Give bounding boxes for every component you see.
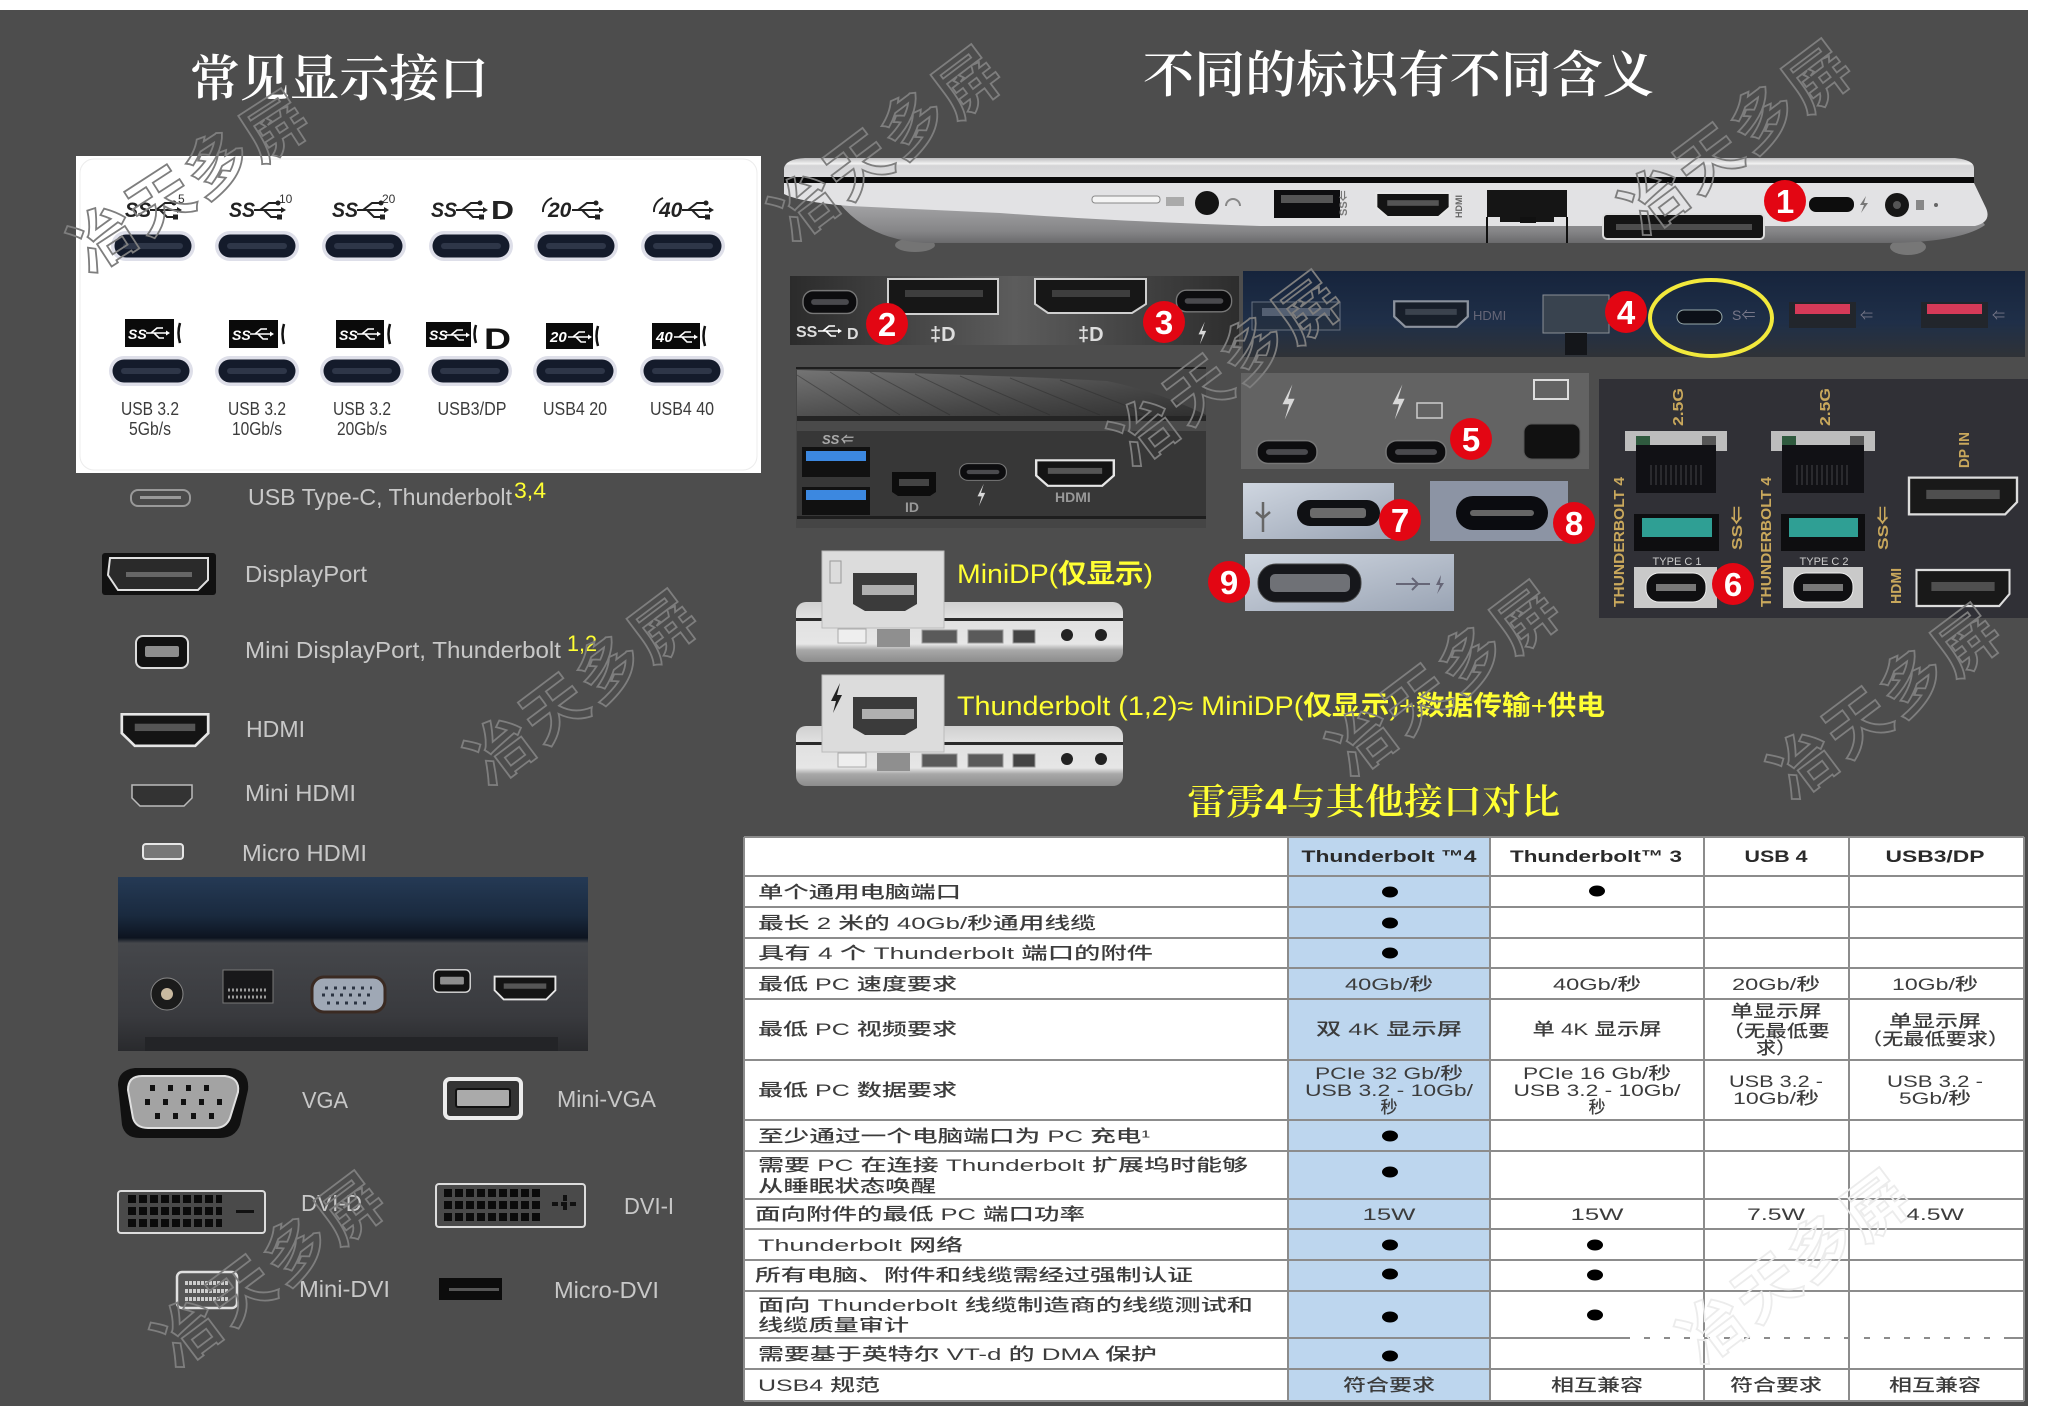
photo: USB-C port (9) xyxy=(1245,554,1454,611)
port captions xyxy=(121,399,714,439)
photo: DP ports strip xyxy=(790,276,1239,346)
row: accessories: 具有 4 个 Thunderbolt 端口的附件 xyxy=(758,944,1153,963)
row: header: Thunderbolt ™4 xyxy=(1302,847,1477,866)
labels: gold port text: SS⇐ xyxy=(1729,506,1746,550)
port captions: 5Gb/s xyxy=(129,419,171,439)
watermarks: 冶天多屏 xyxy=(445,565,717,803)
row: minimum video: 单显示屏 xyxy=(1889,1012,1981,1031)
row: cable audit: 线缆质量审计 xyxy=(758,1315,909,1335)
port: SD slot xyxy=(1092,196,1160,203)
labels: gold port text: TYPE C 1 xyxy=(1653,556,1701,568)
row: badged logos and ports: SS xyxy=(232,327,251,343)
icon: bolt xyxy=(1860,196,1868,213)
row: header xyxy=(1302,847,1984,866)
port captions: USB 3.2 xyxy=(333,399,391,419)
photo: Thunderbolt laptop xyxy=(796,675,1123,786)
row: header: USB3/DP xyxy=(1886,847,1984,866)
row: USB4 spec: 符合要求 xyxy=(1343,1376,1435,1395)
row: header: USB 4 xyxy=(1744,847,1808,866)
labels: gold port text: THUNDERBOLT 4 xyxy=(1611,476,1628,607)
row: plain logos and ports: 20 xyxy=(382,192,396,206)
photo: MiniDP laptop xyxy=(796,551,1123,662)
photo: USB-C port (8) xyxy=(1430,481,1568,541)
row: minimum video: 单 4K 显示屏 xyxy=(1532,1020,1662,1039)
row: single universal port: 单个通用电脑端口 xyxy=(758,883,961,902)
row: plain logos and ports: SS xyxy=(431,199,457,222)
watermarks: 冶天多屏 xyxy=(1599,15,1871,253)
labels: gold port text: 2.5G xyxy=(1817,388,1834,426)
row: plain logos and ports: 20 xyxy=(547,199,572,222)
photo: USB-C port (7) xyxy=(1243,483,1394,539)
item: Mini-DVI: Mini-DVI xyxy=(299,1276,390,1302)
row: minimum speed: 最低 PC 速度要求 xyxy=(758,975,957,994)
item: Mini HDMI xyxy=(132,780,356,806)
row: plain logos and ports xyxy=(111,192,725,261)
item: Micro-DVI: Micro-DVI xyxy=(554,1277,659,1303)
item: DVI-D xyxy=(118,1190,362,1233)
row: port power: 4.5W xyxy=(1906,1205,1964,1224)
row: badged logos and ports: SS xyxy=(128,326,147,342)
row: 2m cable: 最长 2 米的 40Gb/秒通用线缆 xyxy=(758,914,1096,933)
number badges: 8 xyxy=(1565,505,1583,542)
row: minimum data: 最低 PC 数据要求 xyxy=(758,1081,957,1100)
item: DisplayPort: DisplayPort xyxy=(245,561,368,587)
row: minimum data: 10Gb/秒 xyxy=(1733,1089,1819,1108)
row: plain logos and ports: 10 xyxy=(279,192,293,206)
row: port power xyxy=(755,1204,1964,1224)
row: port power: 7.5W xyxy=(1747,1205,1805,1224)
row: minimum data: USB 3.2 - 10Gb/ xyxy=(1514,1081,1681,1100)
row: minimum data: PCIe 32 Gb/秒 xyxy=(1315,1064,1463,1083)
port: power jack xyxy=(1885,193,1938,217)
item: Micro-DVI xyxy=(439,1277,659,1303)
row: wake from sleep: 从睡眠状态唤醒 xyxy=(758,1177,936,1196)
row: DMA protection xyxy=(758,1345,1398,1364)
photo: DP ports strip: SS xyxy=(796,324,818,341)
item: VGA xyxy=(118,1068,349,1138)
photo: monitor rear ports xyxy=(118,877,588,1051)
row: plain logos and ports: D xyxy=(491,195,514,225)
row: port power: 面向附件的最低 PC 端口功率 xyxy=(755,1204,1085,1224)
labels: gold port text: 2.5G xyxy=(1670,388,1687,426)
port: red USB: ⇐ xyxy=(1860,308,1873,323)
item: USB Type-C: 3,4 xyxy=(514,478,546,503)
row: USB4 spec: 相互兼容 xyxy=(1889,1375,1981,1395)
row: minimum data: 5Gb/秒 xyxy=(1899,1089,1971,1108)
row: minimum speed: 10Gb/秒 xyxy=(1892,975,1978,994)
row: minimum data: 秒 xyxy=(1380,1098,1398,1117)
row: accessories xyxy=(758,944,1398,963)
port: HDMI: HDMI xyxy=(1454,195,1464,218)
row: USB4 spec xyxy=(758,1375,1981,1395)
item: USB Type-C xyxy=(131,478,546,510)
row: header: Thunderbolt™ 3 xyxy=(1510,847,1682,866)
port: dock connector xyxy=(1603,214,1764,239)
row: port power: 15W xyxy=(1362,1205,1416,1224)
row: badged logos and ports: SS xyxy=(429,327,448,343)
port captions: 10Gb/s xyxy=(232,419,282,439)
row: minimum video: （无最低要 xyxy=(1722,1022,1830,1041)
row: charging xyxy=(758,1127,1398,1146)
number badges: 7 xyxy=(1391,502,1409,539)
port: red USB xyxy=(1789,302,1873,328)
row: minimum data: USB 3.2 - xyxy=(1887,1072,1983,1091)
item: DisplayPort xyxy=(102,553,368,595)
number badges: 5 xyxy=(1462,421,1480,458)
labels: gold port text: THUNDERBOLT 4 xyxy=(1758,476,1775,607)
port: teal USB pair xyxy=(1634,514,1865,551)
number badges: 1 xyxy=(1776,183,1794,220)
photo: dock front xyxy=(796,368,1206,528)
number badges: 9 xyxy=(1220,564,1238,601)
row: minimum data: USB 3.2 - 10Gb/ xyxy=(1305,1081,1473,1100)
item: Mini DisplayPort: Mini DisplayPort, Thunderbolt xyxy=(245,637,562,663)
port captions: USB4 20 xyxy=(543,399,607,419)
photo: dock front: ID xyxy=(905,499,919,515)
number badges xyxy=(866,180,1806,605)
row: minimum data xyxy=(758,1064,1983,1117)
row: minimum video: （无最低要求） xyxy=(1861,1030,2009,1049)
row: wake from sleep xyxy=(758,1156,1398,1196)
watermarks: 冶天多屏 xyxy=(1089,246,1361,484)
row: cable audit: 面向 Thunderbolt 线缆制造商的线缆测试和 xyxy=(758,1296,1253,1315)
labels: gold port text xyxy=(1611,388,1973,607)
port: red USB xyxy=(1921,302,2005,328)
labels: gold port text: DP IN xyxy=(1956,432,1973,468)
row: certification: 所有电脑、附件和线缆需经过强制认证 xyxy=(755,1266,1193,1285)
title: different marks: 不同的标识有不同含义 xyxy=(1143,35,1654,107)
caption: Thunderbolt description: Thunderbolt (1,2)≈ MiniDP( 仅显示)+数据传输 +供电 xyxy=(957,691,1605,721)
row: USB4 spec: 相互兼容 xyxy=(1551,1375,1643,1395)
item: Mini-VGA: Mini-VGA xyxy=(557,1086,657,1112)
row: plain logos and ports: SS xyxy=(125,199,151,222)
row: USB4 spec: USB4 规范 xyxy=(758,1376,880,1395)
port: red USB: ⇐ xyxy=(1992,308,2005,323)
labels: gold port text: TYPE C 2 xyxy=(1800,556,1848,568)
callout: yellow ring xyxy=(1650,280,1772,356)
item: Mini DisplayPort: 1,2 xyxy=(567,631,597,656)
item: Mini-DVI xyxy=(177,1272,390,1308)
list: display port types xyxy=(102,478,597,866)
row: plain logos and ports: SS xyxy=(332,199,358,222)
table: Thunderbolt 4 comparison xyxy=(744,837,2024,1401)
number badges: 3 xyxy=(1155,304,1173,341)
item: Mini HDMI: Mini HDMI xyxy=(245,780,356,806)
row: badged logos and ports: 20 xyxy=(549,329,567,346)
row: networking: Thunderbolt 网络 xyxy=(758,1235,963,1255)
watermarks: 冶天多屏 xyxy=(1748,579,2020,817)
number badges: 4 xyxy=(1617,294,1636,331)
photo: DP ports strip: ‡D xyxy=(1078,324,1104,346)
port captions: USB3/DP xyxy=(438,399,506,419)
photo: navy laptop rear: HDMI xyxy=(1473,308,1506,323)
number badges: 2 xyxy=(878,306,896,343)
row: minimum video: 求） xyxy=(1756,1039,1796,1058)
row: plain logos and ports: 5 xyxy=(178,192,185,206)
photo: DP ports strip: ‡D xyxy=(930,324,956,346)
port captions: 20Gb/s xyxy=(337,419,387,439)
watermarks: 冶天多屏 xyxy=(49,65,327,290)
item: DVI-I xyxy=(436,1184,674,1227)
watermarks: 冶天多屏 xyxy=(749,21,1021,259)
row: USB4 spec: 符合要求 xyxy=(1730,1376,1822,1395)
port captions: USB 3.2 xyxy=(121,399,179,419)
item: Micro HDMI: Micro HDMI xyxy=(242,840,367,866)
row: badged logos and ports: D xyxy=(484,323,511,356)
row: plain logos and ports: SS xyxy=(229,199,255,222)
row: plain logos and ports: 40 xyxy=(658,199,683,222)
port: silver Type-C pair xyxy=(1634,567,1863,608)
item: Micro HDMI xyxy=(143,840,367,866)
row: DMA protection: 需要基于英特尔 VT-d 的 DMA 保护 xyxy=(758,1345,1157,1364)
item: HDMI xyxy=(122,714,305,746)
caption: MiniDP display only: MiniDP(仅显示) xyxy=(957,559,1153,589)
row: minimum speed: 40Gb/秒 xyxy=(1345,975,1433,994)
port: RJ45 xyxy=(1487,190,1567,243)
item: Mini DisplayPort xyxy=(136,631,597,668)
row: single universal port xyxy=(758,883,1605,902)
row: networking xyxy=(758,1235,1603,1255)
row: 2m cable xyxy=(758,914,1398,933)
port captions: USB 3.2 xyxy=(228,399,286,419)
item: VGA: VGA xyxy=(302,1087,349,1113)
item: DVI-I: DVI-I xyxy=(624,1193,674,1219)
item: Mini-VGA xyxy=(445,1079,657,1118)
row: certification xyxy=(755,1266,1603,1285)
port: audio jack xyxy=(1166,191,1240,215)
row: minimum speed xyxy=(758,975,1978,994)
photo: laptop side view xyxy=(784,158,1988,255)
port: USB-A xyxy=(1274,190,1350,218)
row: badged logos and ports: 40 xyxy=(655,329,673,346)
photo: dock front: HDMI xyxy=(1055,489,1091,505)
labels: gold port text: HDMI xyxy=(1888,568,1905,604)
number badges: 6 xyxy=(1724,566,1742,603)
row: minimum speed: 40Gb/秒 xyxy=(1553,975,1641,994)
row: minimum data: 秒 xyxy=(1588,1098,1606,1117)
photo: DP ports strip: D xyxy=(847,326,859,343)
port: USB-A: SS⇐ xyxy=(1338,190,1350,216)
panel: dock rear (6) xyxy=(1599,379,2028,618)
row: minimum video: 双 4K 显示屏 xyxy=(1316,1020,1462,1039)
title: common display ports: 常见显示接口 xyxy=(190,39,489,111)
row: cable audit xyxy=(758,1296,1603,1335)
row: port power: 15W xyxy=(1570,1205,1624,1224)
port captions: USB4 40 xyxy=(650,399,714,419)
photo: Thunderbolt marks xyxy=(1241,373,1589,469)
row: badged logos and ports xyxy=(109,319,724,386)
port: Thunderbolt xyxy=(1809,197,1854,212)
watermarks: 冶天多屏 xyxy=(1307,556,1579,794)
row: badged logos and ports: SS xyxy=(339,327,358,343)
row: minimum data: PCIe 16 Gb/秒 xyxy=(1523,1064,1671,1083)
item: DVI-D: DVI-D xyxy=(301,1190,362,1216)
row: minimum video: 单显示屏 xyxy=(1730,1002,1822,1021)
port: HDMI xyxy=(1376,193,1464,218)
photo: dock front: SS⇐ xyxy=(822,432,854,447)
row: minimum video xyxy=(758,1002,2009,1058)
row: charging: 至少通过一个电脑端口为 PC 充电¹ xyxy=(758,1127,1150,1146)
row: minimum data: USB 3.2 - xyxy=(1729,1072,1823,1091)
item: USB Type-C: USB Type-C, Thunderbolt xyxy=(248,484,513,510)
watermarks: 冶天多屏 xyxy=(1657,1144,1929,1382)
photo: navy laptop rear: S⇐ xyxy=(1732,307,1755,323)
row: wake from sleep: 需要 PC 在连接 Thunderbolt 扩展坞时能够 xyxy=(758,1156,1248,1175)
heading: Thunderbolt 4 comparison: 雷雳4与其他接口对比 xyxy=(1187,774,1560,825)
labels: gold port text: SS⇐ xyxy=(1875,506,1892,550)
item: HDMI: HDMI xyxy=(246,716,305,742)
row: minimum speed: 20Gb/秒 xyxy=(1732,975,1820,994)
watermarks: 冶天多屏 xyxy=(132,1147,404,1385)
photo: navy laptop rear xyxy=(1243,271,2025,357)
port: RJ45 pair xyxy=(1625,431,1875,493)
panel: USB-C port marks xyxy=(76,156,761,473)
row: minimum video: 最低 PC 视频要求 xyxy=(758,1020,957,1039)
